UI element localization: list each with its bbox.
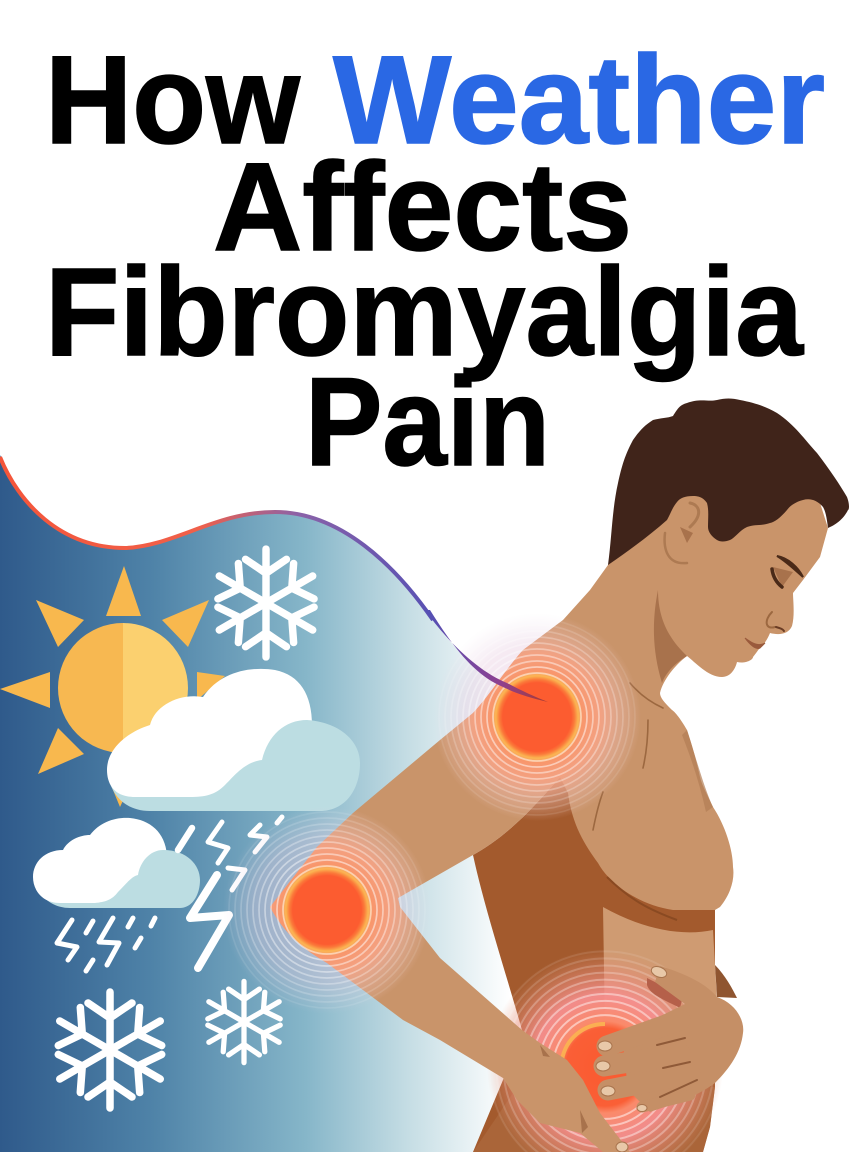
icon: large snowflake bottom <box>49 992 171 1108</box>
icon: lightning bolt <box>190 875 229 968</box>
body, neck and arm <box>270 440 828 1152</box>
background weather panel <box>0 455 560 1152</box>
person <box>270 398 849 1152</box>
forearm hand folds <box>540 1045 588 1133</box>
icon: small snowflake bottom <box>201 981 287 1063</box>
icon: small cloud <box>33 818 200 908</box>
icon: storm streak behind cloud <box>178 828 192 850</box>
body creases <box>593 683 663 830</box>
chest shading <box>682 730 713 812</box>
hand on abdomen <box>596 964 743 1152</box>
icon: small snowflake top <box>209 549 323 657</box>
title: Weather <box>333 31 825 170</box>
title <box>45 31 825 492</box>
title: Fibromyalgia <box>45 243 804 382</box>
pain spot: elbow <box>228 811 423 1009</box>
title: Affects <box>213 138 632 277</box>
pain spot: lower back <box>487 949 723 1152</box>
title: How <box>45 31 301 170</box>
lower abdomen shade <box>473 1087 715 1152</box>
face details <box>745 556 803 648</box>
icon: small lightning and rain <box>57 817 282 971</box>
waist fold <box>715 965 737 998</box>
hair <box>608 398 849 565</box>
icon: sun <box>0 566 225 807</box>
under chest crease <box>607 877 677 920</box>
icon: large cloud <box>107 669 360 811</box>
curve tail into shoulder <box>425 610 548 702</box>
pain spot: shoulder <box>440 621 637 819</box>
waist <box>603 907 717 1065</box>
torso shadow <box>473 777 715 1152</box>
neck shadow <box>654 590 687 683</box>
title: Pain <box>305 353 550 492</box>
ear details <box>665 503 699 563</box>
